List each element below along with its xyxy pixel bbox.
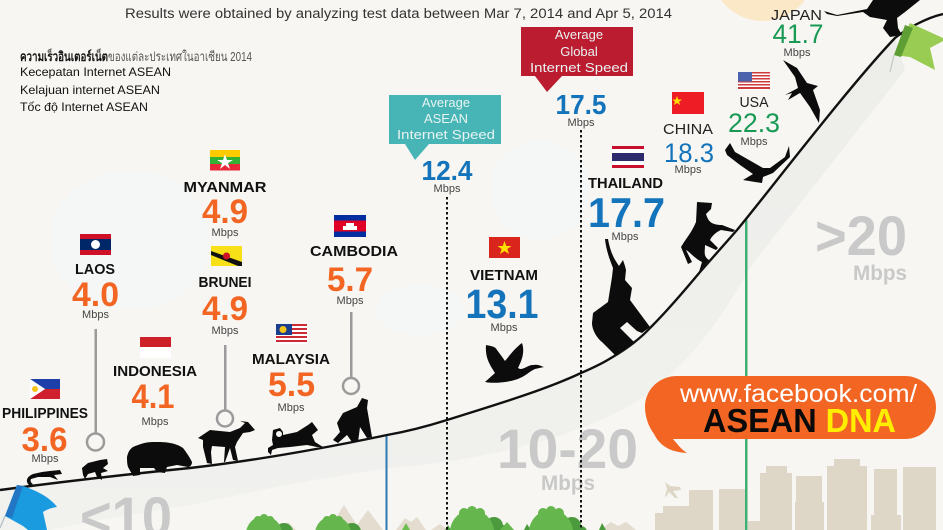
country: Malaysia [252,324,330,414]
icon: frog [82,459,108,480]
icon: lizard [27,470,62,486]
heading block [20,47,252,114]
icon: goat [198,421,255,464]
country: USA: USA [740,94,768,111]
country: USA: Mbps [741,136,768,148]
country: Myanmar: Mbps [212,227,239,239]
bottom scenery: mountains [282,505,636,530]
heading block: Tốc độ Internet ASEAN [20,100,148,114]
band label: 10-20 Mbps: 10-20 [497,417,638,480]
country: Philippines [2,379,88,465]
country: Malaysia: Mbps [278,402,305,414]
country: Vietnam: 13.1 [466,281,538,327]
callout: average ASEAN speed [389,95,501,195]
sun [711,0,815,21]
country: Japan: JAPAN [771,7,822,24]
heading block: Kecepatan Internet ASEAN [20,65,171,79]
callout: average ASEAN speed: ASEAN [424,111,468,126]
country: Vietnam: Mbps [491,322,518,334]
country: Philippines: PHILIPPINES [2,405,88,422]
country: Laos: LAOS [75,261,115,278]
background clouds [50,140,590,335]
reference line: blue [386,436,388,530]
callout: average global speed: Average [555,27,603,42]
country: Laos [72,234,119,450]
country: Vietnam [466,237,538,334]
icon: monkey [824,0,920,37]
country: Cambodia [310,215,398,394]
country: USA: 22.3 [728,108,780,138]
callout: Facebook page [645,376,936,453]
country: Cambodia: 5.7 [327,261,373,299]
country: Thailand: Mbps [612,231,639,243]
band label: 10-20 Mbps: Mbps [541,472,595,495]
country: Laos: 4.0 [72,276,119,314]
country: Vietnam: VIETNAM [470,267,538,284]
country: Japan: Mbps [784,47,811,59]
callout: average ASEAN speed: Internet Speed [397,127,495,142]
country: Brunei: BRUNEI [198,274,252,291]
country: Cambodia: CAMBODIA [310,243,398,260]
callout: average global speed [521,27,633,129]
country: Philippines: 3.6 [22,421,68,459]
band label: over 20 Mbps: Mbps [853,262,907,285]
icon: green finish flag [890,23,943,72]
country: China: 18.3 [664,138,714,168]
callout: Facebook page: ASEAN DNA [703,402,896,439]
icon: ape [333,398,372,443]
country: Japan [771,7,824,59]
country: Brunei: Mbps [212,325,239,337]
icon: blue start flag [0,485,57,530]
callout: average ASEAN speed: Mbps [434,183,461,195]
country: Brunei [198,246,252,426]
country: Indonesia: INDONESIA [113,363,197,380]
title note: Results were obtained by analyzing test data between Mar 7, 2014 and Apr 5, 2014 [125,6,673,21]
country: Thailand [588,146,665,243]
callout: average ASEAN speed: Average [422,95,470,110]
icon: hippo [127,442,192,476]
callout: average ASEAN speed: 12.4 [422,155,473,186]
country: Thailand: 17.7 [588,189,665,236]
callout: average global speed: Internet Speed [530,60,628,75]
callout: average global speed: Mbps [568,117,595,129]
country: Indonesia: Mbps [142,416,169,428]
heading block: Kelajuan internet ASEAN [20,83,160,97]
band label: over 20 Mbps: >20 [815,204,907,267]
country: Myanmar: 4.9 [202,193,248,231]
country: Cambodia: Mbps [337,295,364,307]
country: Malaysia: 5.5 [268,366,315,404]
country: USA [728,72,780,148]
icon: dog [268,422,323,455]
country: China [663,92,714,176]
country: Myanmar [184,150,267,239]
country: Brunei: 4.9 [202,290,248,328]
bottom scenery: city skyline [655,459,936,530]
country: Indonesia: 4.1 [132,378,174,416]
country: China: Mbps [675,164,702,176]
country: Myanmar: MYANMAR [184,179,267,196]
country: Indonesia [113,337,197,428]
country: Laos: Mbps [82,309,109,321]
icon: airplane [665,482,681,498]
heading block: ความเร็วอินเตอร์เน็ตของแต่ละประเทศในอาเซียน 2014 [20,47,252,64]
country: Japan: 41.7 [772,19,824,49]
callout: Facebook page: www.facebook.com/ [679,380,917,408]
icon: swallow [783,60,820,123]
callout: average global speed: Global [560,44,598,59]
icon: duck [485,343,544,383]
country: Malaysia: MALAYSIA [252,351,330,368]
icon: elephant [592,239,650,355]
dotted line: ASEAN average [446,197,448,530]
country: Thailand: THAILAND [588,175,663,192]
dotted line: global average [580,130,582,530]
callout: average global speed: 17.5 [556,89,606,120]
country: Philippines: Mbps [32,453,59,465]
reference line: green [745,220,748,530]
bottom scenery: trees [246,506,606,530]
country: China: CHINA [663,121,713,138]
icon: horse [681,202,735,272]
icon: eagle [725,143,790,183]
